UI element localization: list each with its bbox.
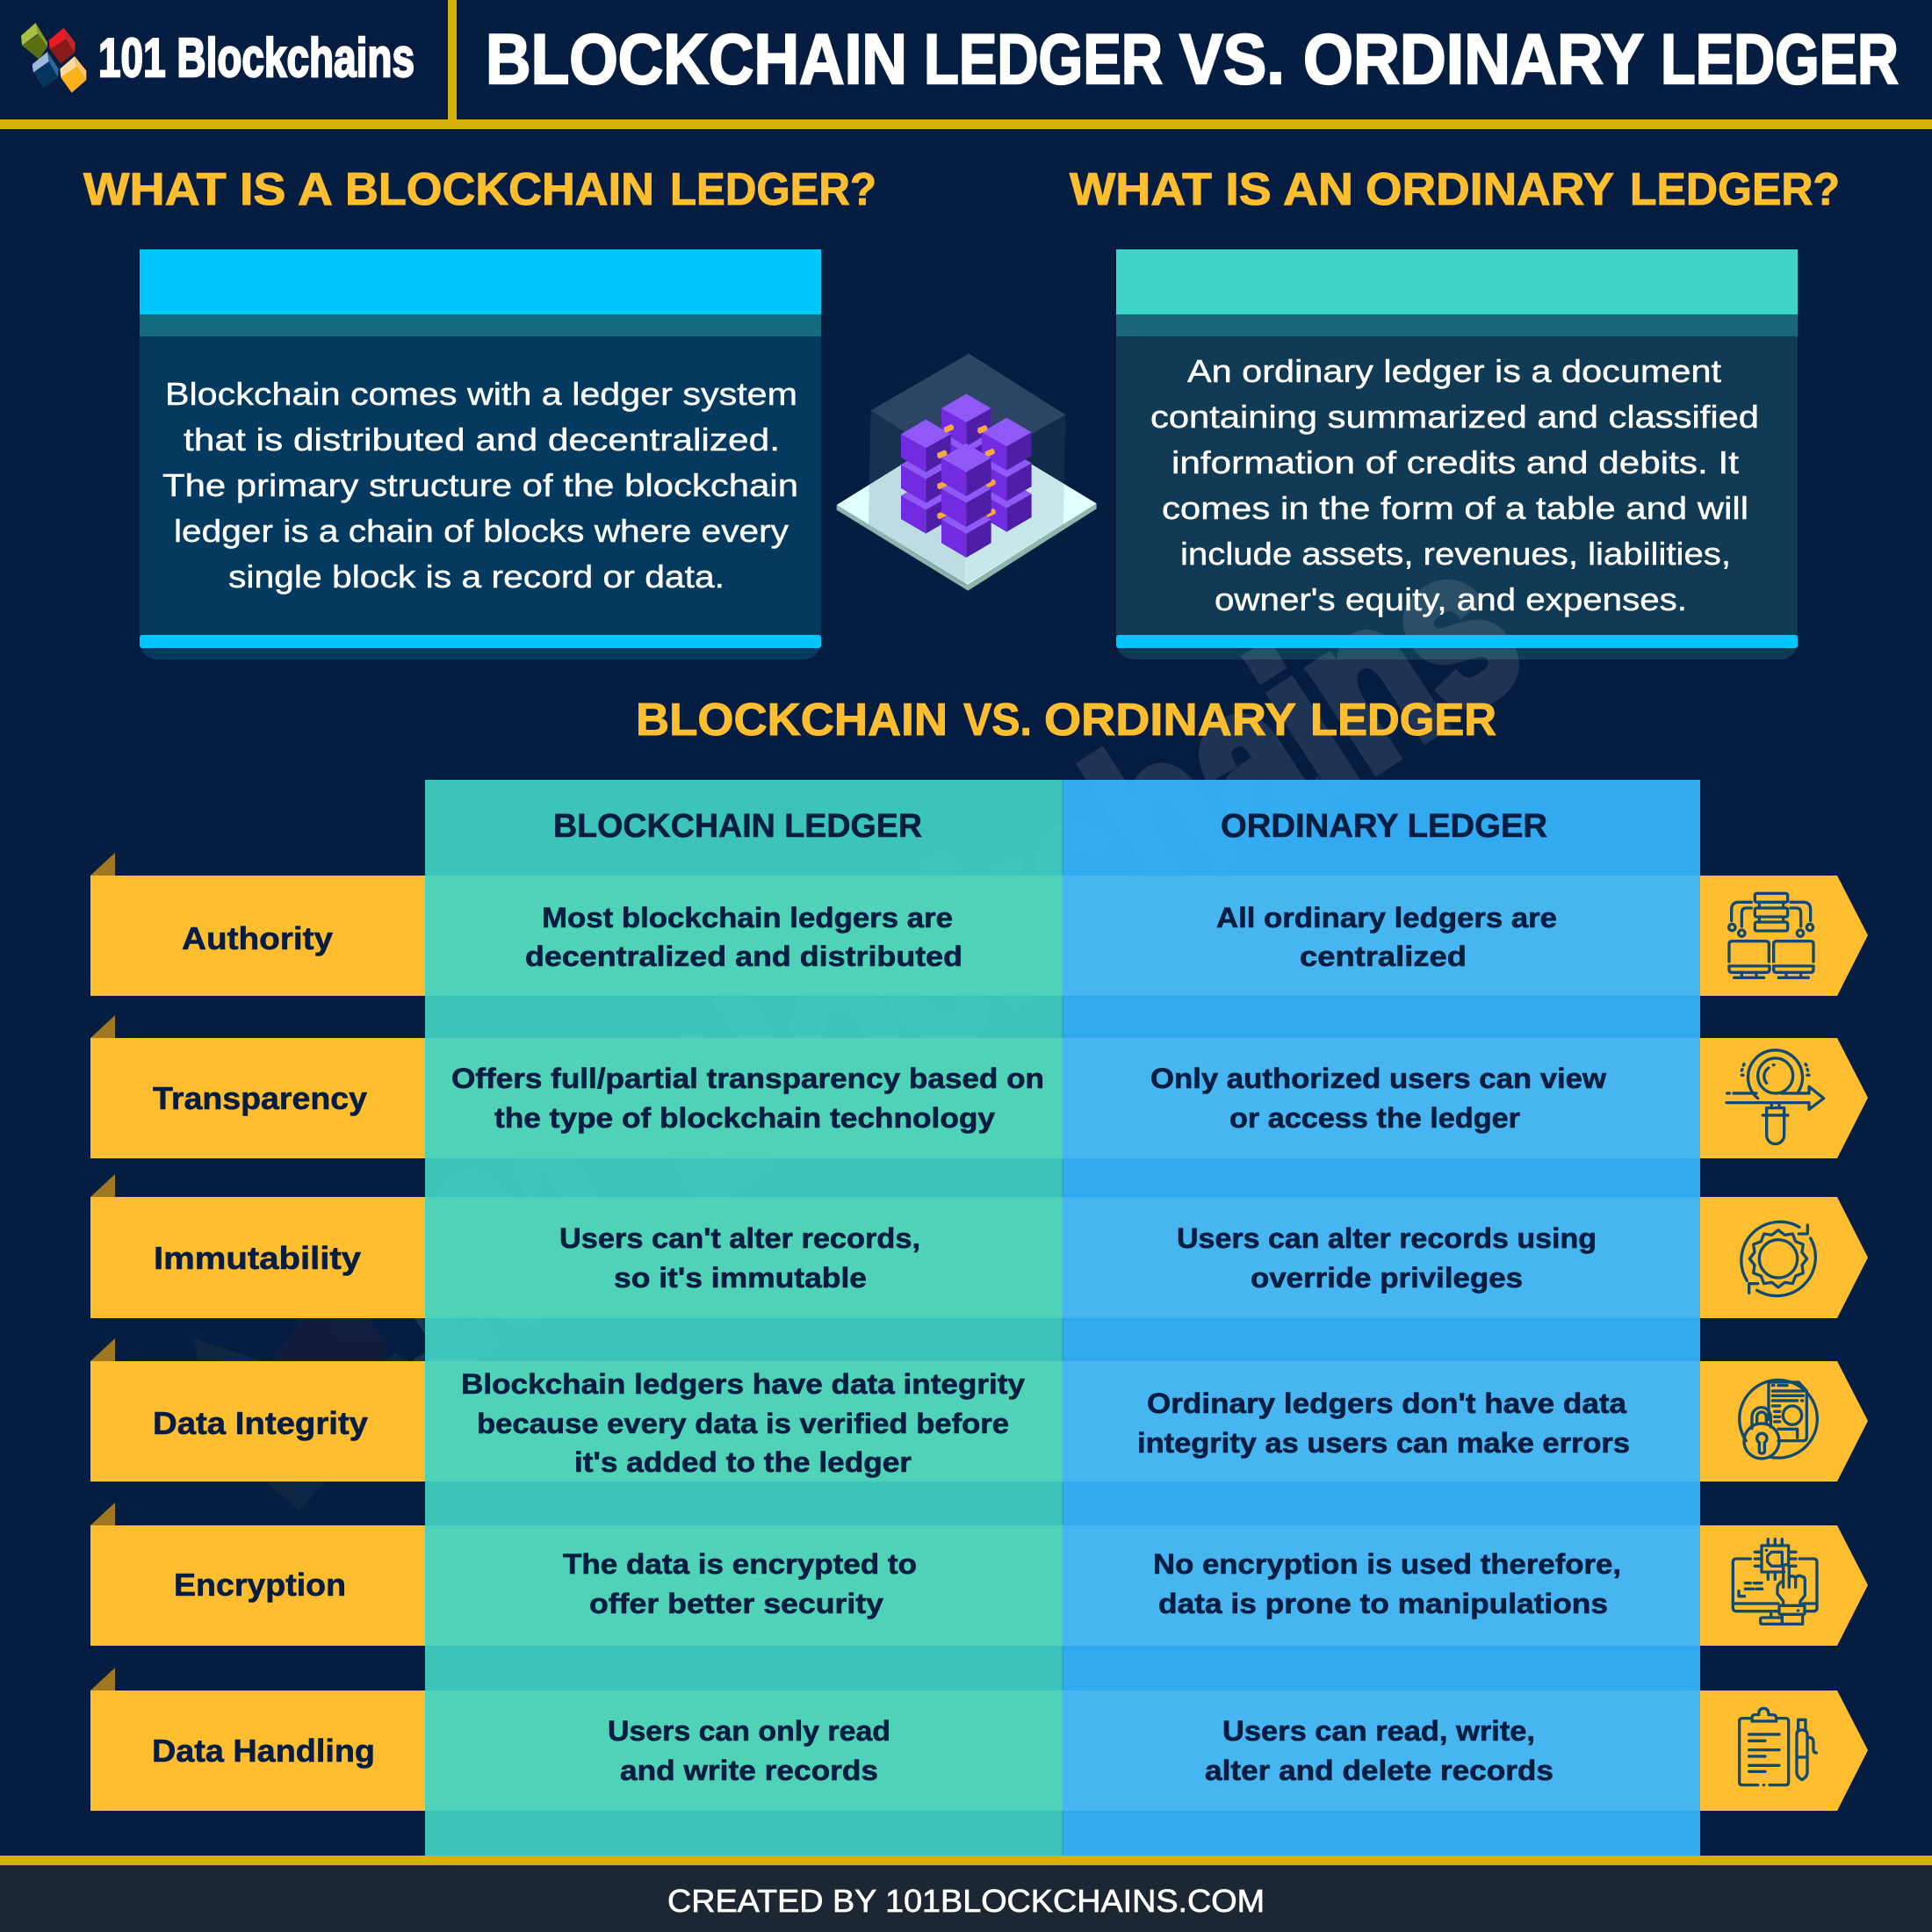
heading: blockchain vs ordinary ledger: BLOCKCHAIN (636, 695, 948, 746)
column header: ordinary ledger: ORDINARY LEDGER (1221, 808, 1547, 845)
watermark: 101 Blockchains (310, 499, 1558, 1431)
icon: document with padlock (1740, 1380, 1817, 1459)
row: immutability: Users can alter records using (1177, 1222, 1597, 1254)
row: authority: Authority (182, 920, 333, 956)
row: immutability (90, 1174, 1868, 1318)
text: ordinary definition: information of credits and debits. It (1171, 444, 1739, 480)
row: transparency: Only authorized users can view (1150, 1063, 1606, 1094)
watermark (193, 499, 1558, 1511)
heading: what is an ordinary ledger: LEDGER? (1630, 164, 1840, 215)
central illustration: blocks in glass box (837, 354, 1097, 591)
text: ordinary definition: owner's equity, and expenses. (1215, 581, 1687, 617)
footer (0, 1856, 1932, 1932)
row: immutability: override privileges (1251, 1262, 1523, 1294)
heading: what is a blockchain ledger: LEDGER? (670, 164, 876, 215)
row: data handling: Users can only read (608, 1715, 890, 1747)
heading: what is an ordinary ledger: ORDINARY (1366, 164, 1614, 215)
column header: blockchain ledger: BLOCKCHAIN LEDGER (553, 808, 922, 845)
row: encryption: The data is encrypted to (563, 1548, 917, 1580)
text: blockchain definition: Blockchain comes with a ledger system (165, 376, 797, 412)
row: data handling (90, 1668, 1868, 1811)
heading: blockchain vs ordinary ledger (636, 695, 1496, 746)
row: transparency: Transparency (153, 1080, 367, 1116)
icon: monitor, chip and hand (1733, 1539, 1817, 1624)
heading: what is an ordinary ledger: WHAT IS AN (1070, 164, 1353, 215)
row: encryption: Encryption (174, 1567, 346, 1603)
heading: blockchain vs ordinary ledger: VS. (963, 695, 1032, 746)
row: transparency: Offers full/partial transparency based on (451, 1063, 1044, 1094)
row: immutability: Users can't alter records, (559, 1222, 920, 1254)
text: blockchain definition: single block is a record or data. (228, 559, 724, 595)
row: data integrity: because every data is verified before (477, 1408, 1009, 1439)
row: data handling: Data Handling (152, 1733, 375, 1769)
main title: BLOCKCHAIN (486, 20, 907, 99)
row: data integrity (90, 1338, 1868, 1481)
row: authority: decentralized and distributed (525, 941, 962, 972)
text: blockchain definition (162, 376, 798, 595)
row: data integrity: Ordinary ledgers don't have data (1147, 1388, 1626, 1419)
main title: LEDGER (924, 20, 1163, 99)
row: data handling: Users can read, write, (1222, 1715, 1535, 1747)
main title (486, 20, 1899, 99)
heading: blockchain vs ordinary ledger: ORDINARY (1044, 695, 1296, 746)
row: transparency (90, 1015, 1868, 1158)
heading: blockchain vs ordinary ledger: LEDGER (1310, 695, 1496, 746)
icon: magnifier with arrow (1727, 1050, 1824, 1144)
icon: clipboard and pen (1740, 1708, 1816, 1785)
heading: what is a blockchain ledger (83, 164, 876, 215)
row: data integrity: it's added to the ledger (574, 1446, 912, 1478)
heading: what is a blockchain ledger: WHAT IS A (83, 164, 333, 215)
text: blockchain definition: that is distributed and decentralized. (184, 422, 780, 458)
row: data integrity: integrity as users can make errors (1137, 1427, 1630, 1459)
icon: network of computers (1729, 893, 1813, 977)
text: blockchain definition: ledger is a chain of blocks where every (174, 513, 789, 549)
row: immutability: so it's immutable (614, 1262, 867, 1294)
row: encryption: data is prone to manipulations (1158, 1588, 1608, 1619)
row: authority (90, 853, 1868, 996)
row: transparency: the type of blockchain technology (494, 1102, 995, 1134)
row: data integrity: Data Integrity (153, 1405, 368, 1441)
row: authority: centralized (1300, 941, 1467, 972)
header bar (0, 0, 1932, 129)
row: data handling: alter and delete records (1205, 1755, 1554, 1786)
text: ordinary definition: containing summarized and classified (1150, 399, 1759, 435)
cyan bar over ordinary panel (1116, 635, 1798, 648)
main title: VS. (1179, 20, 1285, 99)
panel: blockchain ledger definition (140, 249, 821, 660)
row: authority: All ordinary ledgers are (1216, 902, 1557, 934)
logo wordmark: 101 Blockchains (98, 28, 415, 89)
heading: what is an ordinary ledger (1070, 164, 1840, 215)
logo icon (21, 23, 86, 93)
heading: what is a blockchain ledger: BLOCKCHAIN (345, 164, 654, 215)
footer: CREATED BY 101BLOCKCHAINS.COM (667, 1883, 1265, 1919)
row: encryption: No encryption is used therefore, (1153, 1548, 1621, 1580)
text: ordinary definition (1150, 353, 1759, 617)
icon: gear with cycle arrows (1741, 1222, 1815, 1296)
comparison table columns (425, 780, 1700, 1856)
panel: ordinary ledger definition (1116, 249, 1798, 660)
text: blockchain definition: The primary structure of the blockchain (162, 467, 798, 503)
row: transparency: or access the ledger (1229, 1102, 1520, 1134)
row: encryption (90, 1503, 1868, 1646)
row: encryption: offer better security (589, 1588, 883, 1619)
row: authority: Most blockchain ledgers are (542, 902, 953, 934)
text: ordinary definition: An ordinary ledger is a document (1187, 353, 1721, 389)
main title: ORDINARY (1303, 20, 1644, 99)
row: data handling: and write records (620, 1755, 878, 1786)
row: immutability: Immutability (154, 1240, 361, 1276)
text: ordinary definition: include assets, revenues, liabilities, (1180, 536, 1731, 572)
text: ordinary definition: comes in the form of a table and will (1162, 490, 1748, 526)
row: data integrity: Blockchain ledgers have data integrity (461, 1368, 1025, 1400)
